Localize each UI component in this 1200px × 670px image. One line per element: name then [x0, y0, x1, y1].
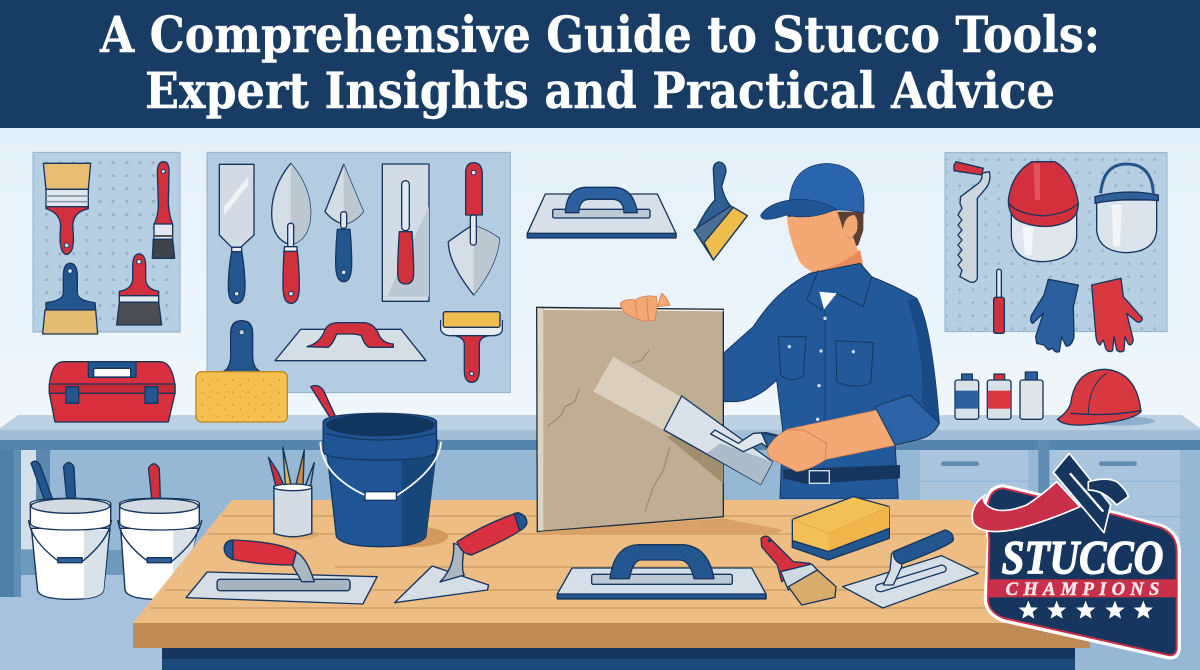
- icon: yellow roller: [441, 312, 502, 382]
- stucco sample board: [537, 293, 827, 532]
- gripping hand: [767, 430, 827, 472]
- cap: [761, 163, 864, 219]
- base cabinets: [920, 440, 1180, 627]
- repaired patch: [593, 357, 683, 430]
- red hard hat on shelf: [1057, 369, 1155, 426]
- left wall tools: [33, 152, 510, 422]
- wall background: [0, 128, 1200, 428]
- icon: pencil cup: [269, 447, 319, 540]
- icon: pointed blue trowel: [325, 164, 363, 282]
- icon: red toolbox: [49, 362, 175, 422]
- cracks: [547, 350, 670, 512]
- icon: screwdriver: [994, 269, 1004, 333]
- icon: blue bucket: [320, 413, 448, 547]
- trowel in hand: [664, 396, 782, 484]
- stars: [1019, 601, 1153, 619]
- icon: flat float with red handle: [275, 323, 426, 361]
- table items right: [540, 497, 978, 608]
- CHAMPIONS wordmark: CHAMPIONS: [1006, 579, 1159, 600]
- icon: small red brush: [152, 162, 175, 258]
- right wall pegboard: [945, 153, 1167, 419]
- icon: blue bottle: [955, 374, 979, 419]
- panel: brush pegboard: [33, 152, 180, 332]
- badge shield: [985, 487, 1179, 657]
- icon: red handle triangle trowel: [395, 513, 527, 603]
- worker: [723, 163, 939, 498]
- board shadow: [540, 518, 783, 535]
- icon: left white bucket: [29, 498, 111, 599]
- work table: [133, 500, 1090, 670]
- icon: grey bottle: [1020, 372, 1043, 419]
- icon: saw: [954, 162, 990, 282]
- icon: scraper: [219, 164, 254, 303]
- icon: tan brush: [43, 163, 91, 254]
- icon: tool in bucket: [311, 386, 341, 428]
- shelf: [0, 415, 1200, 450]
- panel: safety pegboard: [945, 153, 1167, 332]
- icon: red tool handle trowel: [186, 540, 377, 604]
- icon: clear face shield: [1095, 164, 1158, 253]
- icon: wall scraper yellow: [694, 162, 747, 260]
- lower wall and floor: [0, 440, 1200, 670]
- red ribbon: [972, 482, 1080, 532]
- icon: yellow sponge: [792, 497, 889, 560]
- trowel shadow: [667, 433, 723, 483]
- icon: red tool in bucket: [149, 464, 161, 510]
- icon: round red trowel: [272, 163, 311, 303]
- icon: sponge brush: [196, 321, 287, 422]
- header banner: [0, 0, 1200, 128]
- icon: blue tools in bucket: [31, 461, 76, 510]
- shield border: [987, 488, 1177, 655]
- hand on board: [620, 293, 670, 321]
- belt: [783, 465, 900, 484]
- icon: red glove: [1092, 278, 1142, 352]
- blue shirt: [723, 263, 939, 498]
- logo: Stucco Champions: [972, 453, 1179, 657]
- neck and face: [787, 210, 863, 308]
- white buckets: [29, 461, 202, 599]
- icon: red helmet with face shield: [1008, 162, 1078, 262]
- rolled cuff: [875, 395, 939, 445]
- table items left: [186, 386, 527, 604]
- icon: red bottle: [987, 374, 1011, 419]
- icon: small paint brush: [761, 536, 836, 605]
- icon: blue brush: [43, 263, 98, 334]
- icon: right white bucket: [118, 498, 202, 599]
- trowel mark: [1053, 453, 1128, 533]
- icon: blue handled trowel: [843, 530, 978, 608]
- forearm: [770, 409, 897, 470]
- icon: brick trowel: [448, 163, 499, 295]
- STUCCO wordmark: STUCCO: [1002, 532, 1163, 584]
- small blue float on wall: [527, 187, 676, 238]
- icon: notched float tool: [382, 164, 429, 301]
- hair: [830, 212, 863, 250]
- icon: blue glove: [1031, 279, 1078, 352]
- icon: blue float on table: [557, 545, 766, 599]
- title line 1: A Comprehensive Guide to Stucco Tools:: [99, 5, 1100, 64]
- panel: trowel pegboard: [207, 152, 510, 393]
- title line 2: Expert Insights and Practical Advice: [145, 61, 1055, 120]
- icon: dark bristle brush: [117, 254, 162, 325]
- red band: [989, 579, 1176, 597]
- buckle: [809, 471, 829, 483]
